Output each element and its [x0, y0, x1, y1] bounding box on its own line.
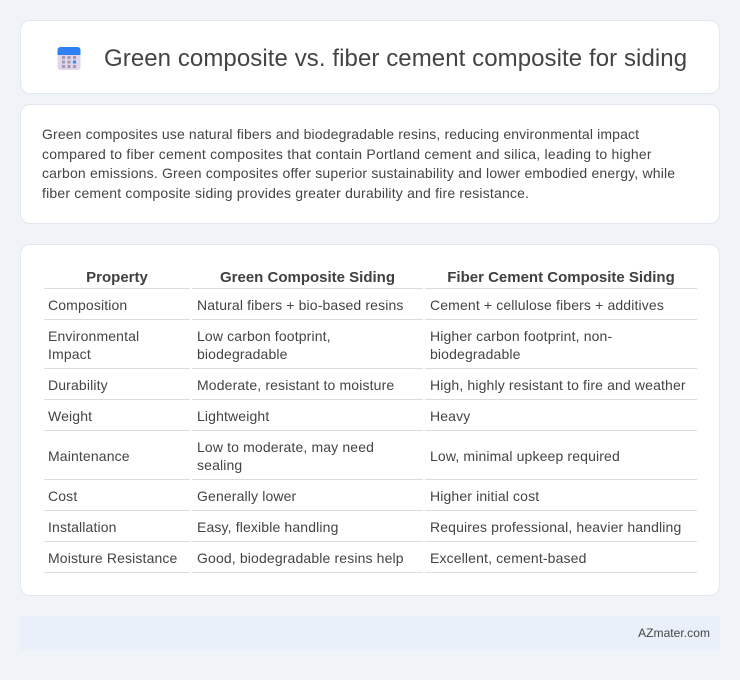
- row: durability: [44, 377, 697, 400]
- row: moisture resistance: Moisture Resistance: [48, 550, 178, 566]
- row: composition: Cement + cellulose fibers + additives: [430, 297, 664, 313]
- row: maintenance: Low to moderate, may need: [197, 439, 374, 455]
- intro paragraph: fiber cement composite siding provides greater durability and fire resistance.: [42, 185, 529, 201]
- intro paragraph: Green composites use natural fibers and biodegradable resins, reducing environmental impact: [42, 126, 639, 142]
- row: installation: Easy, flexible handling: [197, 519, 338, 535]
- row: weight: Lightweight: [197, 408, 269, 424]
- row: cost: Generally lower: [197, 488, 296, 504]
- header row: Fiber Cement Composite Siding: [447, 269, 675, 286]
- footer bar: [20, 616, 720, 650]
- row: environmental impact: biodegradable: [430, 346, 521, 362]
- intro text panel: [20, 104, 720, 224]
- row: cost: Higher initial cost: [430, 488, 539, 504]
- row: maintenance: [44, 439, 697, 480]
- intro paragraph: carbon emissions. Green composites offer superior sustainability and lower embodied energy, while: [42, 165, 675, 181]
- row: durability: Durability: [48, 377, 108, 393]
- comparison table panel: [20, 244, 720, 596]
- row: maintenance: sealing: [197, 457, 242, 473]
- row: environmental impact: Higher carbon footprint, non-: [430, 328, 612, 344]
- row: maintenance: Maintenance: [48, 448, 130, 464]
- row: durability: Moderate, resistant to moisture: [197, 377, 394, 393]
- row: cost: Cost: [48, 488, 77, 504]
- title: Green composite vs. fiber cement composite for siding: [104, 45, 687, 72]
- intro paragraph: compared to fiber cement composites that contain Portland cement and silica, leading to higher: [42, 146, 652, 162]
- row: maintenance: Low, minimal upkeep required: [430, 448, 620, 464]
- row: composition: Composition: [48, 297, 127, 313]
- header row: [44, 269, 697, 289]
- header row: Green Composite Siding: [220, 269, 395, 286]
- row: durability: High, highly resistant to fire and weather: [430, 377, 686, 393]
- row: installation: Installation: [48, 519, 117, 535]
- row: environmental impact: biodegradable: [197, 346, 288, 362]
- row: moisture resistance: Excellent, cement-based: [430, 550, 587, 566]
- row: composition: Natural fibers + bio-based resins: [197, 297, 404, 313]
- row: environmental impact: Impact: [48, 346, 91, 362]
- row: weight: Heavy: [430, 408, 470, 424]
- row: installation: [44, 519, 697, 542]
- title card: [20, 20, 720, 94]
- row: weight: Weight: [48, 408, 92, 424]
- row: moisture resistance: Good, biodegradable resins help: [197, 550, 404, 566]
- intro paragraph: [42, 126, 675, 201]
- header row: Property: [86, 269, 148, 286]
- row: environmental impact: [44, 328, 697, 369]
- row: composition: [44, 297, 697, 320]
- row: weight: [44, 408, 697, 431]
- row: installation: Requires professional, heavier handling: [430, 519, 681, 535]
- row: environmental impact: Environmental: [48, 328, 139, 344]
- row: environmental impact: Low carbon footprint,: [197, 328, 331, 344]
- footer source: AZmater.com: [638, 626, 710, 640]
- row: cost: [44, 488, 697, 511]
- icon: calendar grid: [58, 47, 80, 70]
